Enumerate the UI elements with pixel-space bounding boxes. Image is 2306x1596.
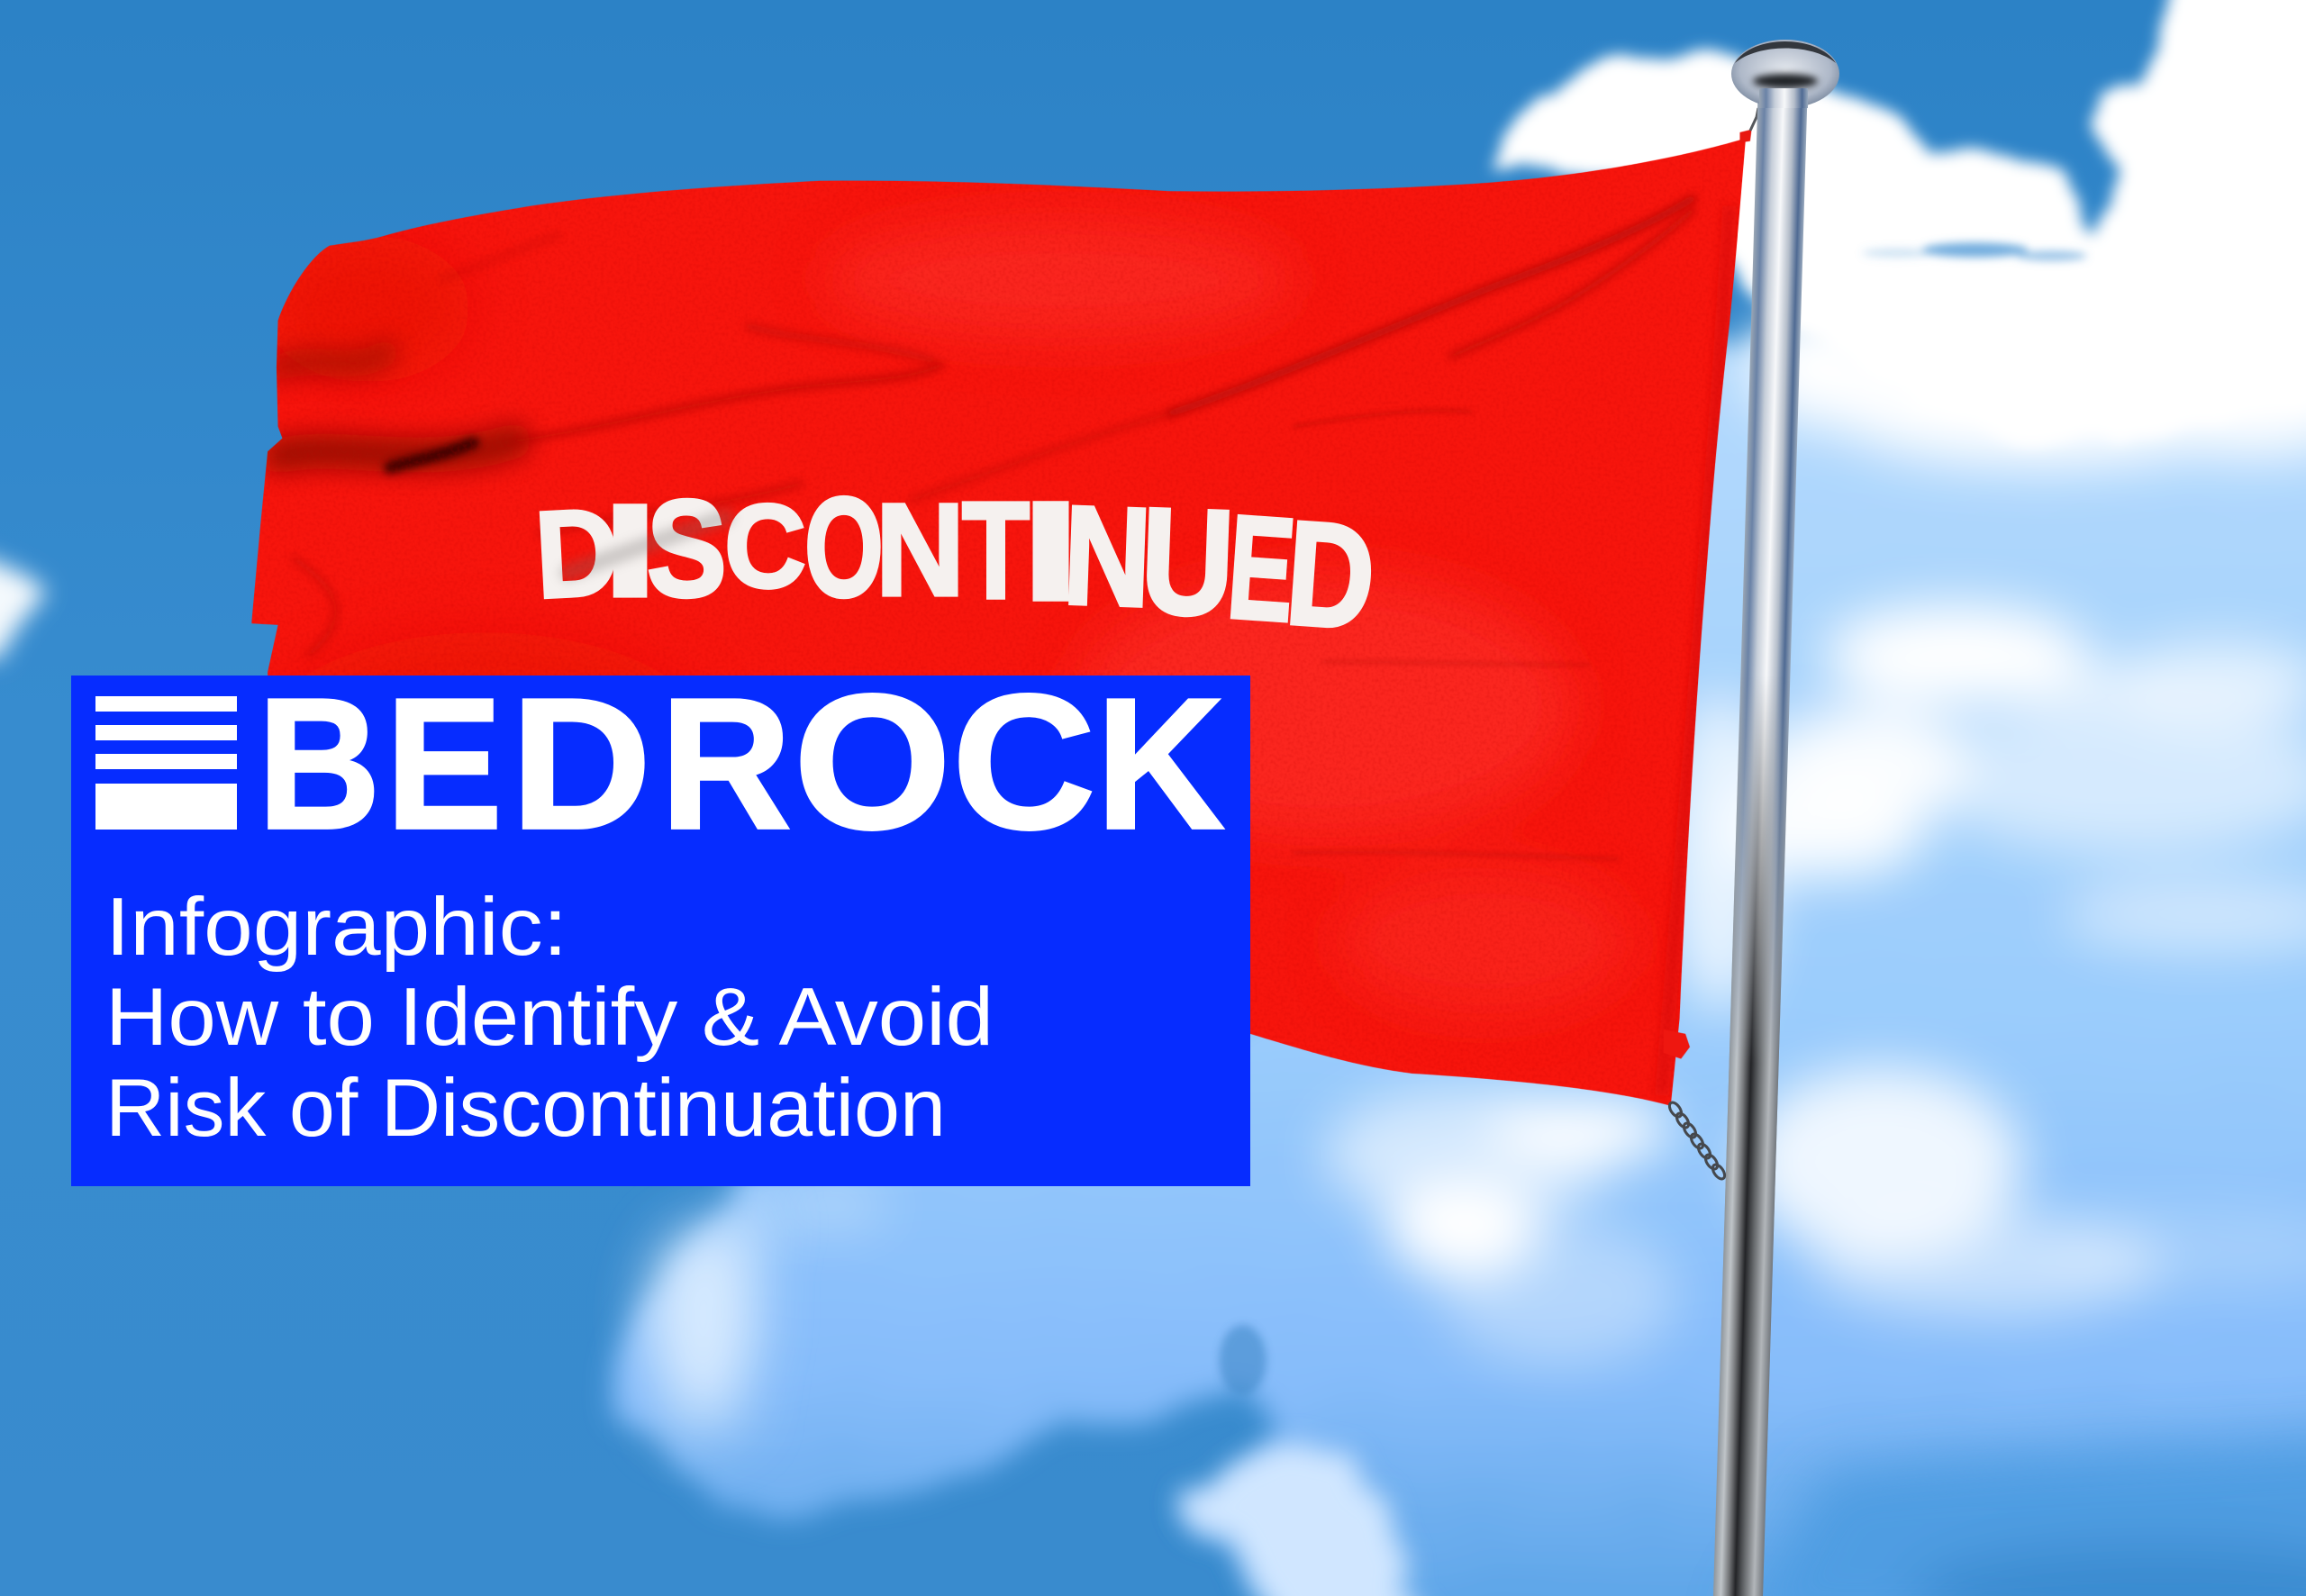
logo wordmark: BEDROCK: K [1096, 660, 1224, 869]
pole finial [1731, 40, 1839, 108]
small cloud at left edge [0, 551, 47, 658]
logo wordmark: BEDROCK: E [386, 660, 503, 869]
flag wording: DISCONTINUED: I [603, 478, 658, 625]
small cloud puff low centre [1184, 1434, 1425, 1596]
chain [1667, 1101, 1727, 1181]
flag wording: DISCONTINUED: D [1282, 491, 1380, 662]
flag corner tab [1664, 1029, 1690, 1059]
darker sky band at lower right [1736, 1434, 2306, 1596]
logo wordmark: BEDROCK: C [952, 656, 1095, 870]
flag wording: DISCONTINUED: D [532, 483, 622, 625]
white edge of lower-left cloud [647, 1187, 771, 1444]
title text [105, 883, 994, 1154]
title text: How to Identify & Avoid [105, 972, 994, 1063]
icon: Bedrock striped logo mark [95, 696, 237, 830]
white cloud puffs [772, 604, 2306, 1367]
flag wording: DISCONTINUED: C [724, 480, 806, 613]
logo wordmark: BEDROCK [258, 656, 1225, 870]
title text: Risk of Discontinuation [105, 1063, 946, 1154]
blue wisps in top cloud [1862, 242, 2087, 261]
flag lighter areas [265, 221, 1632, 1015]
white top-right cloud [1500, 0, 2306, 442]
flag shadow folds [279, 198, 1693, 858]
pole lower, dark reflection [1713, 81, 1808, 1596]
flag wording: DISCONTINUED: S [647, 472, 727, 627]
flag wording: DISCONTINUED: O [803, 469, 883, 628]
logo wordmark: BEDROCK: R [660, 660, 792, 869]
flag wording: DISCONTINUED: I [1021, 474, 1080, 630]
logo wordmark: BEDROCK: O [794, 656, 951, 870]
flag [235, 118, 1765, 1132]
pale lower cloud mass [612, 295, 2306, 1596]
flag right hem [1662, 206, 1730, 1095]
logo wordmark: BEDROCK: B [258, 660, 380, 869]
dark wisp of cloud shadow [1220, 1325, 1266, 1395]
flag wording: DISCONTINUED: N [876, 477, 965, 624]
flagpole [1713, 40, 1839, 1596]
soft lower edge of top cloud [1750, 309, 2306, 467]
flag wording: DISCONTINUED: T [962, 474, 1030, 629]
cloth grain texture [235, 118, 1765, 1132]
flag wording: DISCONTINUED: N [1061, 477, 1154, 638]
flag top clip [1750, 108, 1758, 131]
flag wording: DISCONTINUED: U [1138, 477, 1236, 648]
flag top tab and clip [1739, 130, 1752, 142]
flag cloth [235, 118, 1765, 1132]
panel: blue title box [71, 676, 1250, 1186]
flag wording: DISCONTINUED: E [1223, 485, 1300, 654]
title text: Infographic: [105, 883, 567, 973]
logo wordmark: BEDROCK: D [511, 660, 651, 869]
pole upper, polished [1713, 81, 1808, 1596]
